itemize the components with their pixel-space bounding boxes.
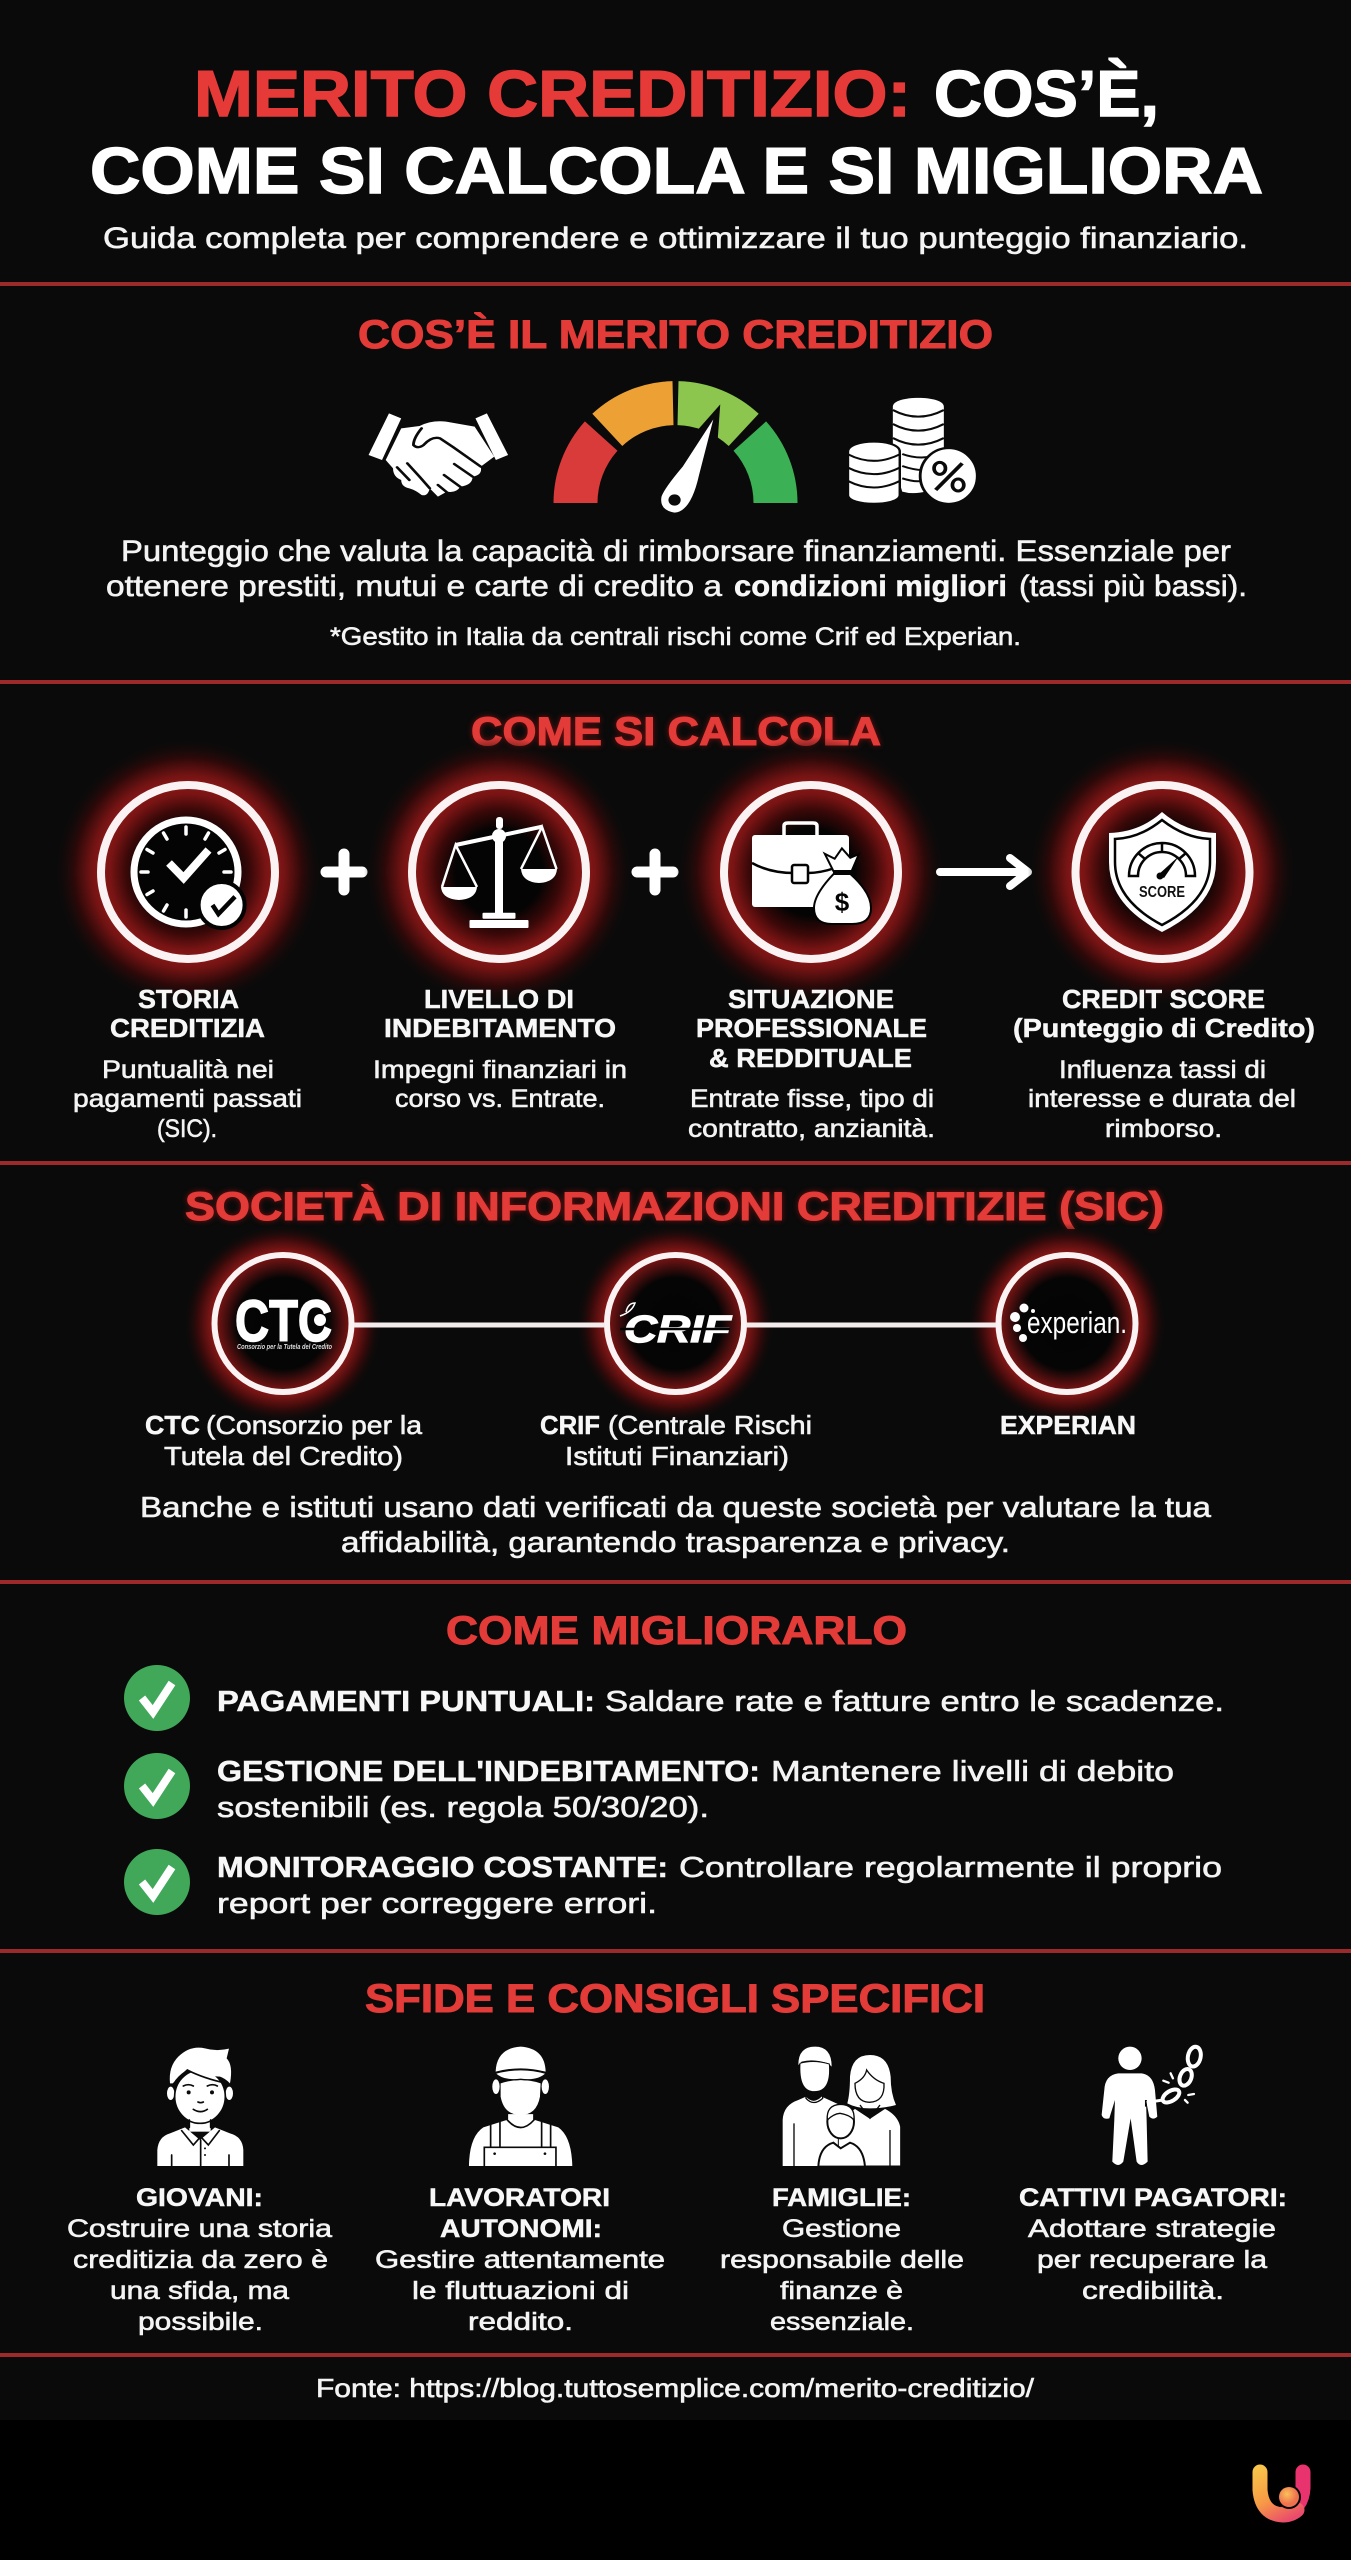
text: giovani: possibile. bbox=[138, 2308, 263, 2336]
label: CTC: (Consorzio per la bbox=[206, 1410, 423, 1440]
text: giovani: GIOVANI: bbox=[136, 2184, 263, 2212]
tip: monitoraggio costante: MONITORAGGIO COSTANTE: bbox=[217, 1852, 668, 1884]
icon: credit score shield: SCORE bbox=[1139, 884, 1185, 901]
factor: situazione professionale: SITUAZIONE bbox=[728, 984, 894, 1014]
arrow bbox=[940, 858, 1028, 886]
factor: situazione professionale: contratto, anzianità. bbox=[688, 1115, 935, 1143]
paragraph: ottenere prestiti, mutui e carte di credito a bbox=[106, 570, 722, 603]
text: cattivi pagatori bbox=[1019, 2184, 1287, 2305]
heading: SFIDE E CONSIGLI SPECIFICI bbox=[365, 1977, 985, 2021]
factor: livello di indebitamento: corso vs. Entrate. bbox=[395, 1085, 605, 1113]
tip: gestione dell'indebitamento: sostenibili (es. regola 50/30/20). bbox=[217, 1792, 709, 1824]
paragraph bbox=[140, 1492, 1212, 1559]
tip: pagamenti puntuali: Saldare rate e fatture entro le scadenze. bbox=[605, 1686, 1224, 1718]
factor: storia creditizia: Puntualità nei bbox=[102, 1056, 274, 1084]
heading: SOCIETÀ DI INFORMAZIONI CREDITIZIE (SIC) bbox=[185, 1184, 1164, 1229]
factor: livello di indebitamento: INDEBITAMENTO bbox=[384, 1013, 616, 1043]
source line: Fonte: https://blog.tuttosemplice.com/merito-creditizio/ bbox=[316, 2373, 1035, 2403]
icon: handshake bbox=[369, 413, 508, 497]
text: lavoratori autonomi: AUTONOMI: bbox=[440, 2215, 602, 2243]
text: cattivi pagatori: CATTIVI PAGATORI: bbox=[1019, 2184, 1287, 2212]
tip: gestione dell'indebitamento: Mantenere livelli di debito bbox=[771, 1756, 1174, 1788]
icon: coins and percent bbox=[848, 398, 977, 504]
label: CTC: CTC bbox=[145, 1410, 200, 1440]
paragraph bbox=[106, 535, 1247, 603]
factor: storia creditizia: STORIA bbox=[138, 984, 239, 1014]
icon: plus bbox=[326, 854, 362, 890]
text: cattivi pagatori: credibilità. bbox=[1082, 2277, 1224, 2305]
text: famiglie: FAMIGLIE: bbox=[772, 2184, 911, 2212]
logo: Experian: experian. bbox=[1027, 1305, 1127, 1340]
heading: COME SI CALCOLA bbox=[471, 710, 881, 754]
icon: credit score shield bbox=[1028, 737, 1298, 1007]
icon: family bbox=[783, 2047, 901, 2167]
factor: livello di indebitamento: Impegni finanziari in bbox=[373, 1056, 627, 1084]
title bbox=[90, 57, 1263, 207]
factor: livello di indebitamento: LIVELLO DI bbox=[424, 984, 574, 1014]
icon: clock with check bbox=[53, 737, 323, 1007]
logo: CRIF: CRIF bbox=[624, 1309, 733, 1351]
logo: CTC bbox=[183, 1224, 383, 1424]
text: giovani: una sfida, ma bbox=[110, 2277, 289, 2305]
factor: credit score: interesse e durata del bbox=[1028, 1085, 1296, 1113]
text: famiglie: essenziale. bbox=[770, 2308, 914, 2336]
factor: situazione professionale: PROFESSIONALE bbox=[696, 1013, 927, 1043]
logo: CTC: CTC bbox=[235, 1289, 332, 1354]
label: CRIF: Istituti Finanziari) bbox=[565, 1441, 789, 1471]
panel: come migliorarlo bbox=[124, 1609, 1224, 1920]
icon: briefcase and money bag: $ bbox=[835, 887, 850, 917]
tip: gestione dell'indebitamento bbox=[124, 1753, 1174, 1824]
text: giovani: creditizia da zero è bbox=[73, 2246, 328, 2274]
icon: balance scale bbox=[364, 737, 634, 1007]
factor: situazione professionale: & REDDITUALE bbox=[709, 1043, 912, 1073]
subtitle: Guida completa per comprendere e ottimizzare il tuo punteggio finanziario. bbox=[103, 222, 1248, 255]
tip: monitoraggio costante: report per correggere errori. bbox=[217, 1888, 657, 1920]
panel: come si calcola bbox=[53, 710, 1315, 1143]
label: CTC: Tutela del Credito) bbox=[164, 1441, 403, 1471]
text: lavoratori autonomi: reddito. bbox=[468, 2308, 573, 2336]
paragraph: condizioni migliori bbox=[734, 570, 1007, 603]
factor: credit score: (Punteggio di Credito) bbox=[1013, 1013, 1315, 1043]
factor: situazione professionale: Entrate fisse, tipo di bbox=[690, 1085, 934, 1113]
tip: monitoraggio costante bbox=[124, 1849, 1222, 1920]
label: Experian: EXPERIAN bbox=[1000, 1410, 1136, 1440]
text: famiglie: responsabile delle bbox=[720, 2246, 964, 2274]
panel: sfide e consigli specifici bbox=[67, 1977, 1287, 2336]
panel: cos'è il merito creditizio bbox=[106, 312, 1247, 651]
paragraph: Banche e istituti usano dati verificati da queste società per valutare la tua bbox=[140, 1492, 1212, 1524]
text: lavoratori autonomi: Gestire attentamente bbox=[375, 2246, 665, 2274]
title: COME SI CALCOLA E SI MIGLIORA bbox=[90, 134, 1263, 207]
header bbox=[90, 57, 1263, 255]
connector line bbox=[354, 1322, 996, 1328]
tip: gestione dell'indebitamento: GESTIONE DELL'INDEBITAMENTO: bbox=[217, 1756, 760, 1788]
factor: credit score: CREDIT SCORE bbox=[1062, 984, 1265, 1014]
paragraph: (tassi più bassi). bbox=[1019, 570, 1247, 603]
icon: person breaking chain bbox=[1102, 2046, 1203, 2165]
icon: briefcase and money bag bbox=[676, 737, 946, 1007]
tip: pagamenti puntuali: PAGAMENTI PUNTUALI: bbox=[217, 1686, 595, 1718]
title: MERITO CREDITIZIO: bbox=[194, 57, 911, 130]
text: cattivi pagatori: Adottare strategie bbox=[1028, 2215, 1276, 2243]
icon: young person bbox=[157, 2048, 243, 2166]
logo: tuttosemplice bbox=[1260, 2472, 1303, 2515]
label: CRIF: CRIF bbox=[540, 1410, 600, 1440]
text: lavoratori autonomi: le fluttuazioni di bbox=[412, 2277, 629, 2305]
text: giovani bbox=[67, 2184, 332, 2336]
label: CRIF: (Centrale Rischi bbox=[608, 1410, 812, 1440]
label: CTC bbox=[145, 1410, 423, 1471]
icon: plus bbox=[637, 854, 673, 890]
factor: storia creditizia: CREDITIZIA bbox=[110, 1013, 265, 1043]
text: lavoratori autonomi bbox=[375, 2184, 665, 2336]
factor: situazione professionale bbox=[688, 984, 935, 1143]
text: giovani: Costruire una storia bbox=[67, 2215, 332, 2243]
icon: credit gauge bbox=[554, 381, 798, 513]
factor: storia creditizia: pagamenti passati bbox=[73, 1085, 302, 1113]
icon: self-employed worker bbox=[469, 2047, 572, 2166]
footnote: *Gestito in Italia da centrali rischi come Crif ed Experian. bbox=[330, 623, 1021, 651]
factor: credit score: rimborso. bbox=[1105, 1115, 1222, 1143]
factor: storia creditizia bbox=[73, 984, 302, 1143]
text: famiglie: Gestione bbox=[782, 2215, 901, 2243]
text: cattivi pagatori: per recuperare la bbox=[1037, 2246, 1267, 2274]
heading: COS’È IL MERITO CREDITIZIO bbox=[358, 312, 993, 357]
paragraph: affidabilità, garantendo trasparenza e privacy. bbox=[341, 1527, 1010, 1559]
factor: storia creditizia: (SIC). bbox=[157, 1115, 217, 1143]
text: lavoratori autonomi: LAVORATORI bbox=[429, 2184, 610, 2212]
tip: monitoraggio costante: Controllare regolarmente il proprio bbox=[679, 1852, 1222, 1884]
logo: CTC: Consorzio per la Tutela del Credito bbox=[237, 1344, 333, 1351]
factor: credit score: Influenza tassi di bbox=[1059, 1056, 1266, 1084]
factor: credit score bbox=[1013, 984, 1315, 1143]
logo: CRIF bbox=[576, 1224, 776, 1424]
title: COS’È, bbox=[934, 57, 1159, 130]
factor: livello di indebitamento bbox=[373, 984, 627, 1113]
text: famiglie bbox=[720, 2184, 964, 2336]
text: famiglie: finanze è bbox=[780, 2277, 903, 2305]
logo: Experian bbox=[967, 1224, 1167, 1424]
label: CRIF bbox=[540, 1410, 812, 1471]
heading: COME MIGLIORARLO bbox=[446, 1609, 907, 1653]
panel: società di informazioni creditizie bbox=[140, 1184, 1212, 1559]
paragraph: Punteggio che valuta la capacità di rimborsare finanziamenti. Essenziale per bbox=[121, 535, 1231, 568]
tip: pagamenti puntuali bbox=[124, 1665, 1224, 1731]
